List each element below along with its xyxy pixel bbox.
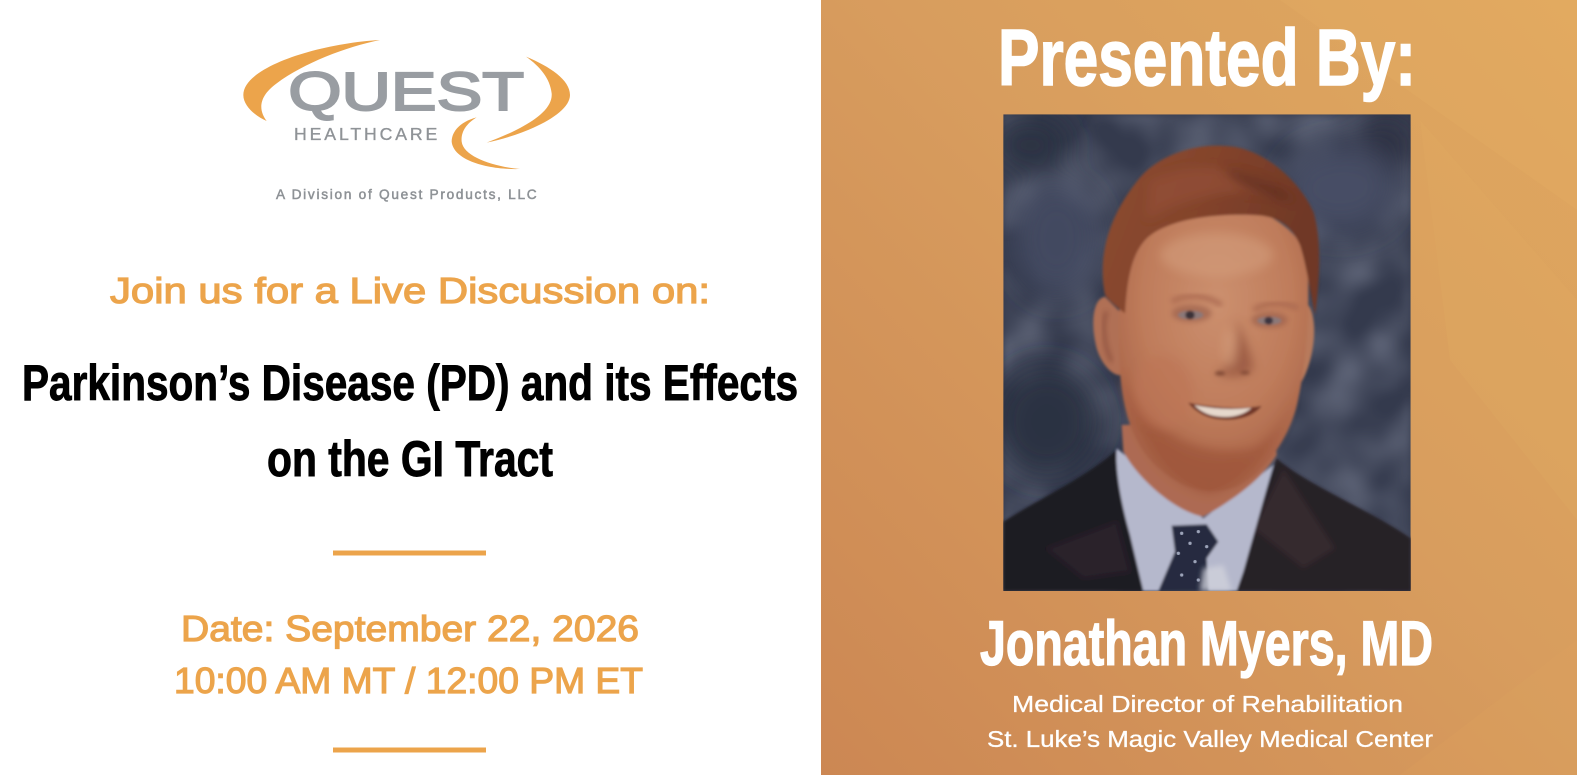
forehead highlight bbox=[1162, 235, 1272, 273]
shirt bbox=[1116, 448, 1273, 591]
logo wordmark: QUEST bbox=[288, 63, 524, 122]
icon: bottom orange swoosh bbox=[452, 117, 520, 169]
eyes bbox=[1178, 311, 1203, 319]
date and time: 10:00 AM MT / 12:00 PM ET bbox=[174, 660, 643, 701]
tie bbox=[1158, 524, 1218, 591]
icon: left orange swoosh bbox=[243, 40, 380, 121]
icon: right orange swoosh bbox=[487, 57, 570, 143]
shirt highlight bbox=[1200, 565, 1232, 591]
title bbox=[22, 355, 798, 487]
mouth bbox=[1188, 403, 1262, 420]
nose shadow bbox=[1217, 318, 1253, 377]
date and time bbox=[174, 608, 643, 701]
suit bbox=[1003, 448, 1143, 591]
logo tagline: A Division of Quest Products, LLC bbox=[276, 187, 537, 202]
presenter name: Jonathan Myers, MD bbox=[980, 609, 1433, 679]
logo: Quest Healthcare bbox=[243, 40, 570, 202]
date and time: Date: September 22, 2026 bbox=[181, 608, 639, 649]
divider upper bbox=[333, 550, 486, 556]
photo: presenter portrait bbox=[990, 112, 1420, 591]
hair bbox=[1103, 146, 1319, 315]
eye sockets bbox=[1172, 305, 1212, 322]
brows bbox=[1172, 296, 1222, 305]
panel: presenter bbox=[821, 0, 1577, 775]
neck bbox=[1122, 422, 1277, 517]
panel: white left background bbox=[0, 0, 821, 775]
cheek and jaw blush bbox=[1136, 400, 1158, 426]
presenter role: Medical Director of Rehabilitation bbox=[1012, 691, 1403, 717]
presenter role bbox=[987, 691, 1433, 752]
face bbox=[1119, 204, 1308, 491]
title: Parkinson’s Disease (PD) and its Effects bbox=[22, 355, 798, 411]
left ear bbox=[1093, 297, 1127, 375]
presenter role: St. Luke’s Magic Valley Medical Center bbox=[987, 726, 1433, 752]
beard shading bbox=[1130, 396, 1277, 494]
right ear bbox=[1300, 304, 1316, 382]
title: on the GI Tract bbox=[267, 431, 553, 487]
logo subtitle: HEALTHCARE bbox=[294, 124, 438, 144]
divider lower bbox=[333, 748, 486, 752]
heading: presented by: Presented By: bbox=[998, 13, 1416, 102]
intro heading: Join us for a Live Discussion on: bbox=[110, 270, 710, 311]
